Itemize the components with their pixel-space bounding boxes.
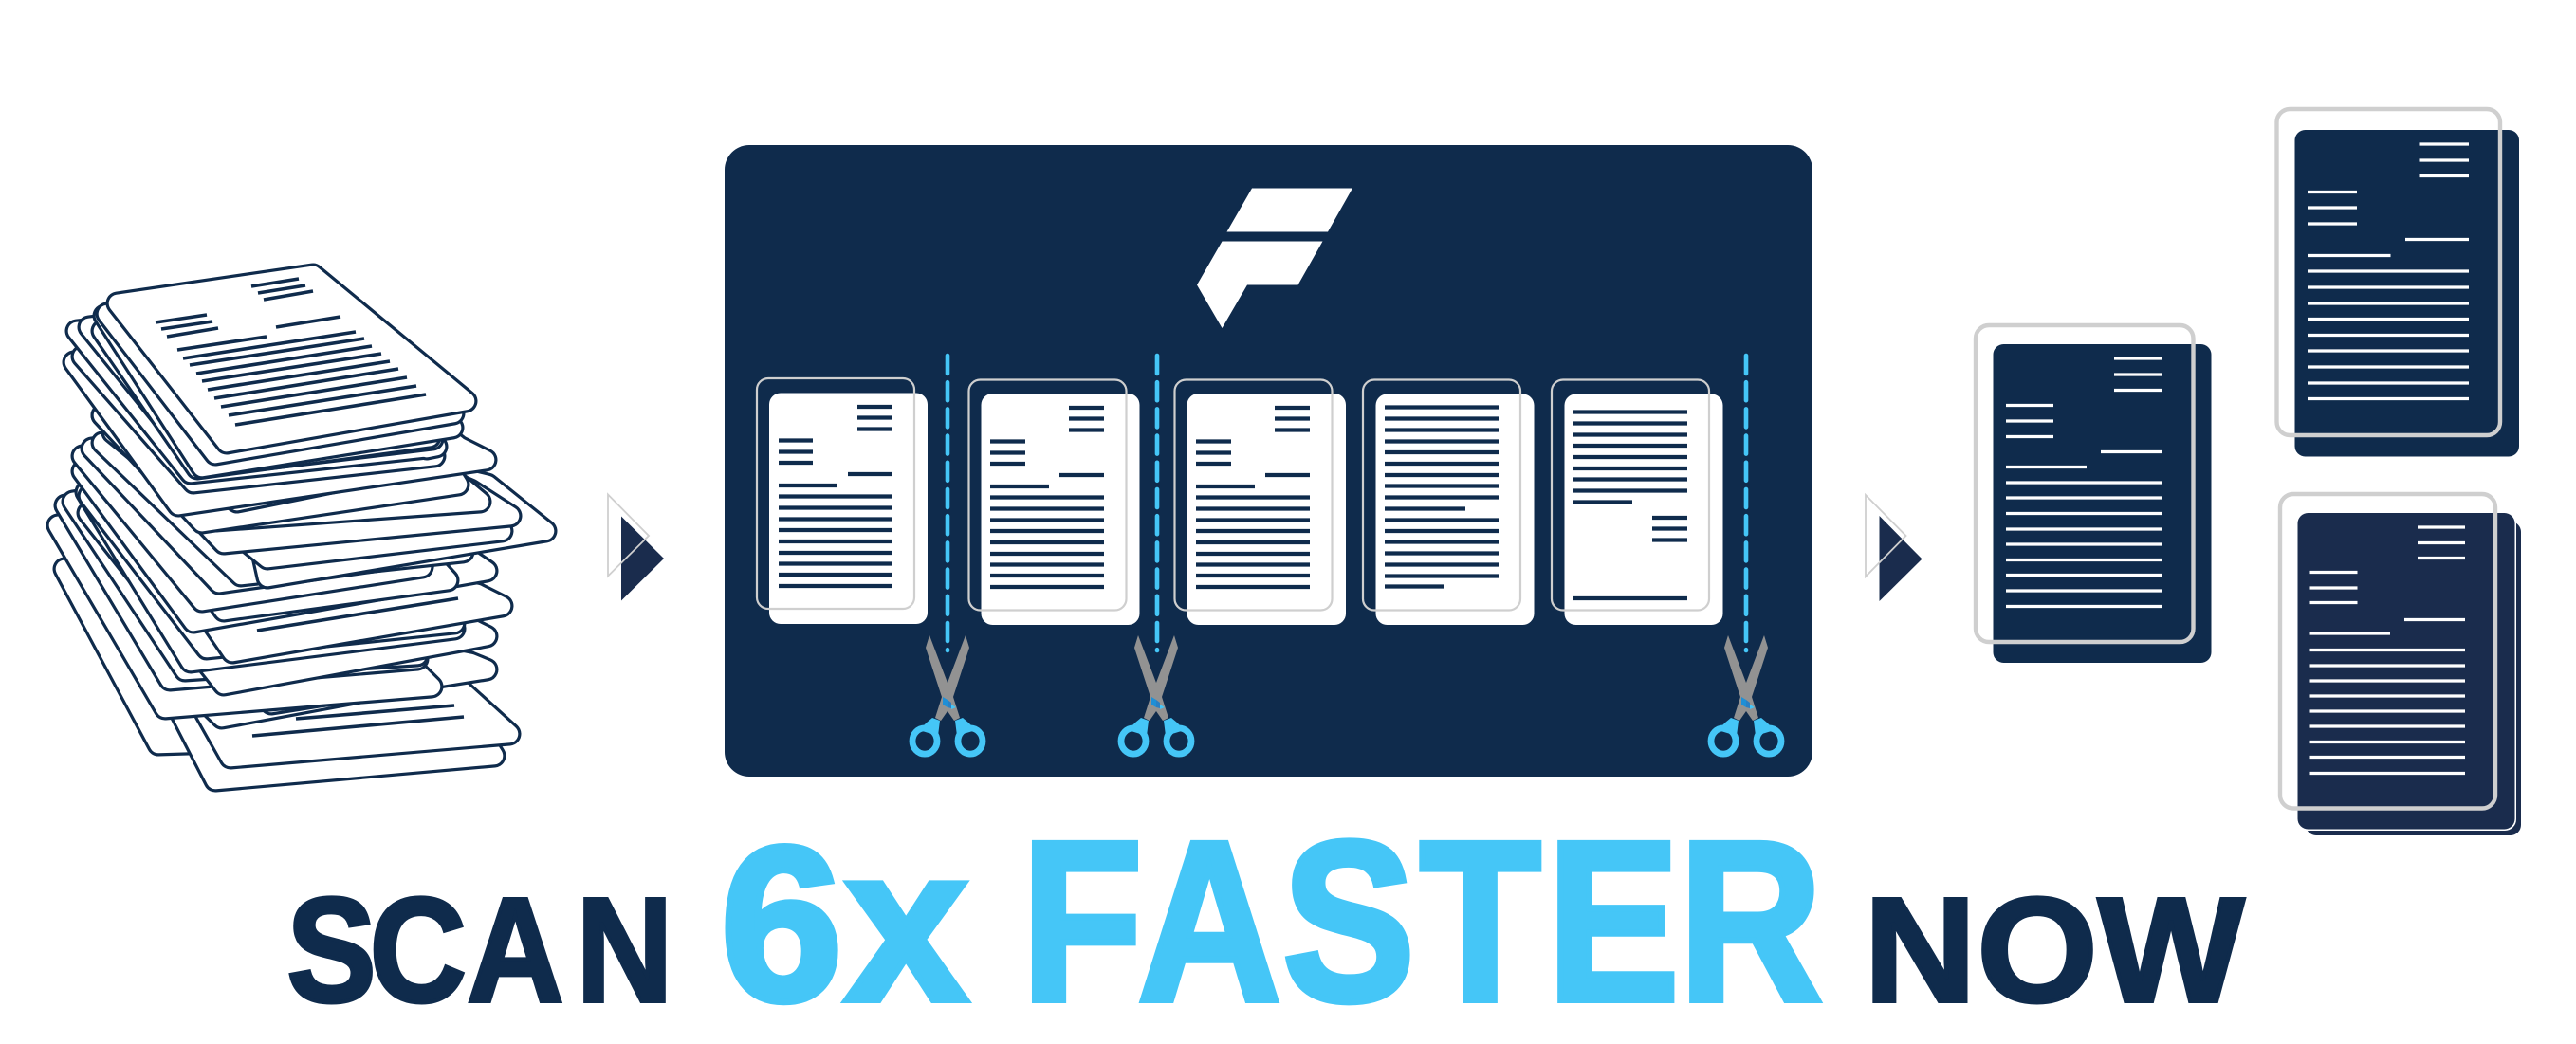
icon: scissors 2 bbox=[1121, 635, 1191, 754]
page 1 bbox=[757, 378, 928, 624]
arrow: scanner to outputs bbox=[1866, 495, 1922, 601]
icon: scissors 1 bbox=[912, 635, 983, 754]
output document: centre bbox=[1976, 325, 2212, 663]
cut line 2 bbox=[1155, 356, 1159, 650]
headline bbox=[286, 794, 2244, 1044]
arrow: stack to scanner bbox=[608, 495, 664, 601]
headline word: FASTER: FASTER bbox=[1021, 794, 1822, 1044]
page 4 bbox=[1363, 379, 1535, 625]
icon: scissors 3 bbox=[1711, 635, 1781, 754]
page 3 bbox=[1174, 379, 1346, 625]
page 2 bbox=[969, 379, 1140, 625]
top sheet of the stack bbox=[118, 275, 466, 443]
headline word: NOW: NOW bbox=[1864, 867, 2244, 1033]
logo bbox=[1197, 188, 1352, 328]
output document: top right bbox=[2276, 109, 2519, 457]
cut line 3 bbox=[1744, 356, 1748, 650]
output document: bottom right bbox=[2280, 494, 2521, 835]
page 5 bbox=[1552, 379, 1722, 625]
headline word: 6x: 6x bbox=[721, 802, 967, 1044]
panel: scanner bbox=[725, 145, 1812, 777]
headline word: SCAN: SCAN bbox=[286, 867, 673, 1034]
cut line 1 bbox=[946, 356, 949, 650]
paper stack bbox=[58, 275, 545, 780]
